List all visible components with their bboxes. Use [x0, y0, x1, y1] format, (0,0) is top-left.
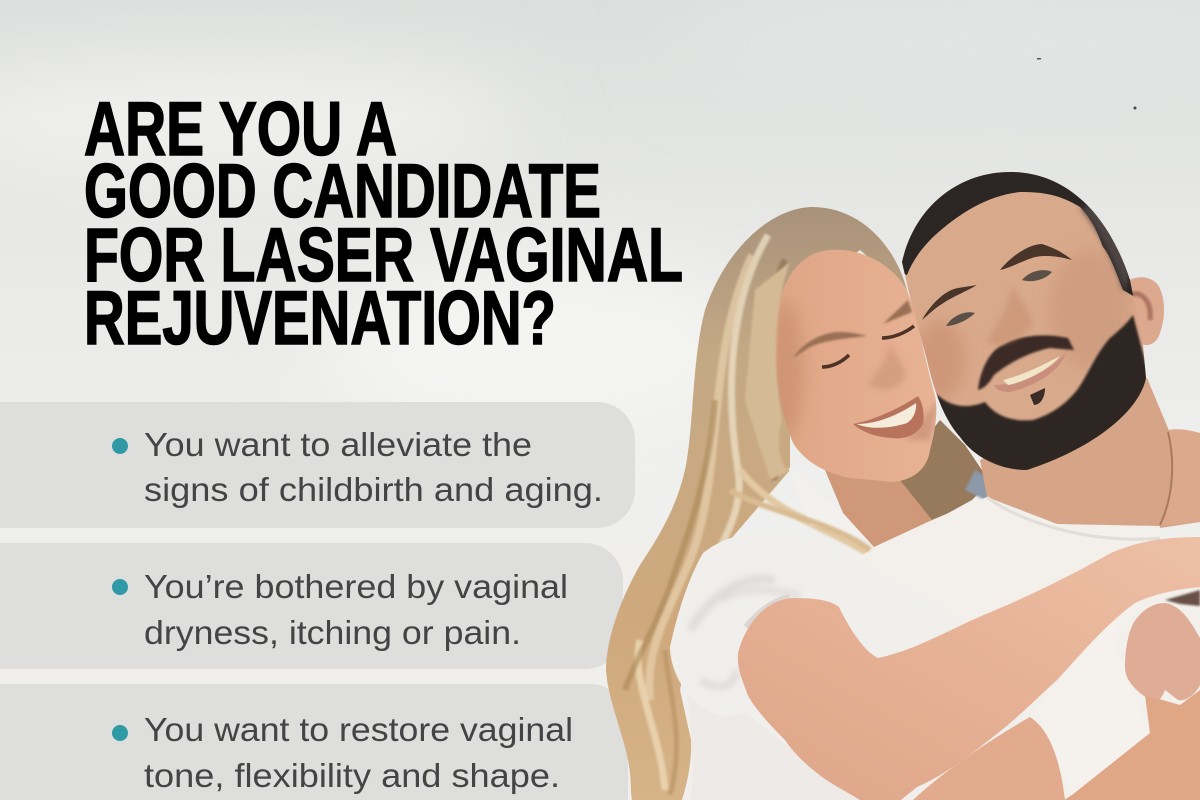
panel: second reason	[0, 543, 623, 669]
woman's lips	[853, 396, 924, 438]
title: FOR LASER VAGINAL	[84, 213, 683, 298]
reason 3 text	[112, 711, 573, 794]
man's neck and woman's forearm on shoulder	[980, 378, 1200, 528]
woman's white blouse	[670, 467, 860, 800]
woman's hair	[606, 207, 1000, 800]
woman's neck	[825, 470, 932, 547]
woman's face	[767, 250, 938, 482]
man's hair	[902, 172, 1134, 296]
woman's closed eyes	[822, 326, 914, 367]
man's lower lip	[994, 352, 1066, 392]
man's moustache	[978, 335, 1074, 390]
woman's hair strands over the face edge	[745, 262, 790, 480]
reason 3 text: tone, flexibility and shape.	[144, 757, 560, 794]
reason 3 text: You want to restore vaginal	[144, 711, 573, 748]
man's nose shadow	[987, 285, 1033, 345]
icon: bullet 1	[112, 438, 128, 454]
woman's hair strand over the sleeve	[730, 490, 870, 550]
woman's nose	[870, 348, 905, 390]
man's shirt	[855, 497, 1200, 800]
man's ear	[1125, 277, 1164, 345]
panel: first reason	[0, 402, 635, 528]
title: REJUVENATION?	[84, 276, 556, 361]
man's head	[902, 172, 1164, 470]
panel: third reason	[0, 684, 628, 800]
icon: bullet 3	[112, 725, 128, 741]
man's soul patch	[1030, 388, 1045, 405]
woman's teeth	[857, 403, 916, 428]
man's arm and hand	[913, 590, 1200, 800]
reason 2 text: You’re bothered by vaginal	[144, 568, 568, 605]
woman's eyebrows	[793, 332, 867, 358]
man's eyebrows	[1000, 244, 1072, 270]
icon: bullet 2	[112, 579, 128, 595]
man's eyes	[1022, 270, 1052, 281]
title: ARE YOU A	[84, 87, 397, 172]
title	[84, 87, 683, 361]
title: GOOD CANDIDATE	[84, 149, 601, 234]
reason 2 text: dryness, itching or pain.	[144, 614, 521, 651]
reason 1 text: signs of childbirth and aging.	[144, 471, 603, 508]
man's smile	[1003, 356, 1060, 385]
reason 1 text	[112, 426, 603, 508]
woman's arm	[738, 537, 1200, 800]
photo: couple embracing	[606, 150, 1200, 800]
man's beard	[930, 315, 1150, 480]
reason 1 text: You want to alleviate the	[144, 426, 532, 463]
reason 2 text	[112, 568, 568, 651]
